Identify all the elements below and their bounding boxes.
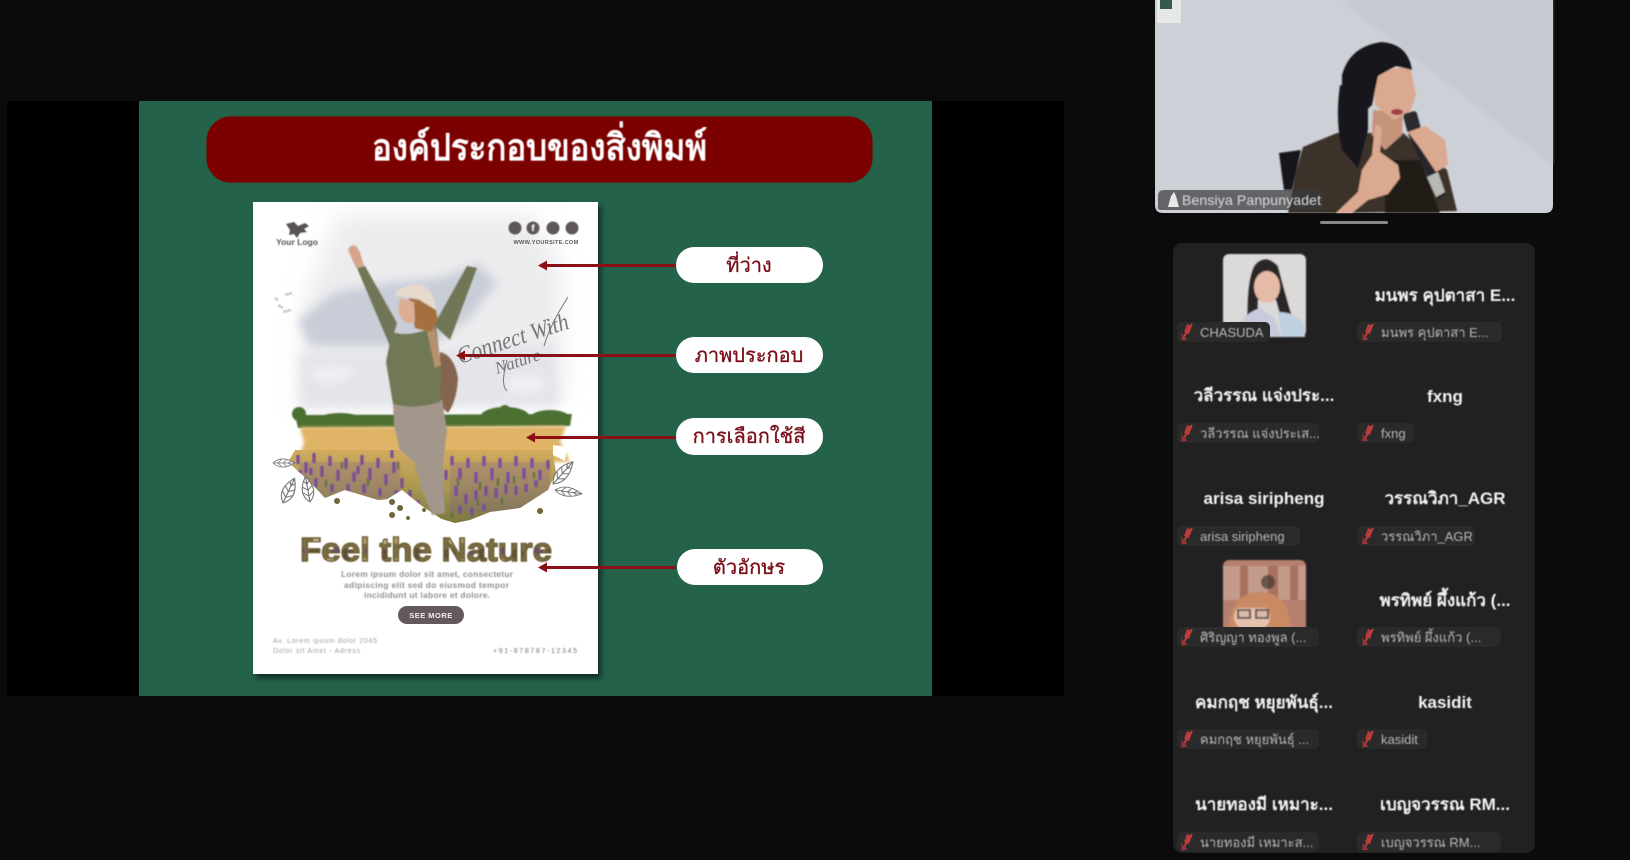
label: typography — [677, 549, 823, 585]
script caption: Nature — [491, 345, 543, 378]
see more button: SEE MORE — [409, 611, 453, 620]
poster body text: incididunt ut labore et dolore. — [364, 590, 490, 600]
avatar: CHASUDA — [1223, 254, 1306, 337]
participant names: พรทิพย์ ผึ้งแก้ว (... — [1379, 587, 1511, 610]
torso — [386, 326, 441, 407]
name tag text: kasidit — [1381, 732, 1418, 747]
label: white space — [676, 247, 823, 283]
participant names: วลีวรรณ แจ่งประ... — [1194, 385, 1334, 405]
holding hand — [1408, 126, 1448, 172]
name tag text: นายทองมี เหมาะส... — [1200, 835, 1313, 850]
illustration: woman with raised arms — [348, 245, 477, 515]
pointing hand — [1336, 125, 1400, 213]
poster photo: sky wash — [275, 214, 572, 528]
neck — [1372, 110, 1403, 150]
name tags — [1177, 322, 1502, 852]
poster — [253, 202, 598, 674]
name tag text: CHASUDA — [1200, 325, 1264, 340]
arrow: illustration — [456, 350, 676, 360]
logo: Your Logo — [276, 237, 318, 247]
name tag text: พรทิพย์ ผึ้งแก้ว (... — [1381, 628, 1481, 645]
video wall — [1155, 0, 1553, 213]
participant names: fxng — [1427, 387, 1463, 406]
face — [1372, 66, 1416, 120]
inner shirt — [1385, 160, 1440, 213]
avatar: second photo — [1223, 560, 1306, 642]
poster address — [273, 638, 577, 655]
arrow: colour — [526, 432, 676, 442]
poster photo: wheat field — [298, 426, 570, 462]
script caption — [454, 297, 572, 391]
hat — [396, 285, 436, 310]
panel: participants — [1173, 243, 1535, 853]
poster body text: Lorem ipsum dolor sit amet, consectetur — [341, 569, 514, 579]
name tag text: วลีวรรณ แจ่งประเส... — [1200, 426, 1320, 441]
muted icons — [1181, 324, 1373, 850]
label: typography: ตัวอักษร — [713, 557, 785, 579]
participant names — [1194, 286, 1515, 815]
panel: speaker video — [1155, 0, 1553, 213]
social icons: f — [532, 223, 536, 233]
participant names: kasidit — [1418, 693, 1472, 712]
label: illustration — [676, 337, 823, 373]
ponytail — [1338, 85, 1368, 168]
lips — [1391, 109, 1403, 115]
name tag text: ศิริญญา ทองพูล (... — [1200, 630, 1306, 646]
slide background — [139, 101, 932, 696]
poster address: Dolor sit Amet - Adress — [273, 648, 360, 655]
poster address: +91-878787-12345 — [493, 648, 577, 655]
logo — [276, 222, 318, 247]
jacket — [1288, 133, 1457, 213]
hair — [409, 298, 438, 332]
label: white space: ที่ว่าง — [726, 251, 772, 277]
speaker name tag: Bensiya Panpunyadet — [1182, 192, 1321, 208]
participant names: arisa siripheng — [1204, 489, 1324, 508]
backpack — [438, 352, 458, 413]
left arm — [357, 266, 397, 346]
name tag text: arisa siripheng — [1200, 529, 1285, 544]
wall thermostat — [1157, 0, 1181, 23]
poster headline: Feel the Nature — [300, 531, 552, 568]
participant names: เบญจวรรณ RM... — [1380, 795, 1510, 815]
participant names: คมกฤช หยุยพันธุ์... — [1195, 692, 1333, 713]
hair — [1342, 42, 1412, 118]
social icons — [508, 222, 578, 234]
participant names: วรรณวิภา_AGR — [1384, 489, 1506, 508]
see more button — [398, 606, 464, 624]
title banner — [206, 116, 873, 183]
wall light band — [1340, 0, 1552, 165]
script caption: Connect With — [454, 309, 572, 370]
arrow: typography — [538, 562, 676, 572]
poster address: Av. Lorem ipsum dolor 2045 — [273, 638, 377, 645]
slide letterbox — [7, 101, 1064, 696]
arrow: white space — [538, 260, 676, 270]
title banner: องค์ประกอบของสิ่งพิมพ์ — [372, 121, 707, 168]
trousers — [393, 400, 447, 515]
illustration: decorative leaves — [273, 458, 583, 505]
strap — [427, 328, 441, 368]
name tag text: คมกฤช หยุยพันธุ์ ... — [1200, 732, 1309, 748]
white brush specks — [386, 445, 566, 519]
participant names: มนพร คุปตาสา E... — [1375, 286, 1515, 306]
name tag text — [1200, 325, 1489, 850]
poster photo: lavender field — [289, 450, 556, 523]
face — [398, 298, 415, 323]
name tag text: มนพร คุปตาสา E... — [1381, 325, 1489, 341]
name tag text: fxng — [1381, 426, 1406, 441]
panel: shared slide — [7, 101, 1064, 696]
label: colour choice: การเลือกใช้สี — [693, 425, 805, 448]
divider handle — [1320, 221, 1388, 224]
right arm — [434, 266, 477, 340]
website: WWW.YOURSITE.COM — [513, 240, 579, 246]
chair — [1279, 150, 1301, 190]
participant names: นายทองมี เหมาะ... — [1195, 794, 1333, 814]
name tag text: วรรณวิภา_AGR — [1381, 529, 1473, 544]
microphone — [1408, 130, 1446, 199]
name tag text: เบญจวรรณ RM... — [1381, 835, 1480, 850]
label: colour choice — [676, 418, 823, 455]
speaker name tag — [1158, 190, 1323, 210]
poster body text: adipiscing elit sed do eiusmod tempor — [344, 580, 510, 590]
label: illustration: ภาพประกอบ — [695, 345, 803, 367]
speaker figure — [1279, 42, 1457, 213]
poster photo: tree line — [292, 405, 572, 428]
poster body text — [341, 569, 514, 600]
